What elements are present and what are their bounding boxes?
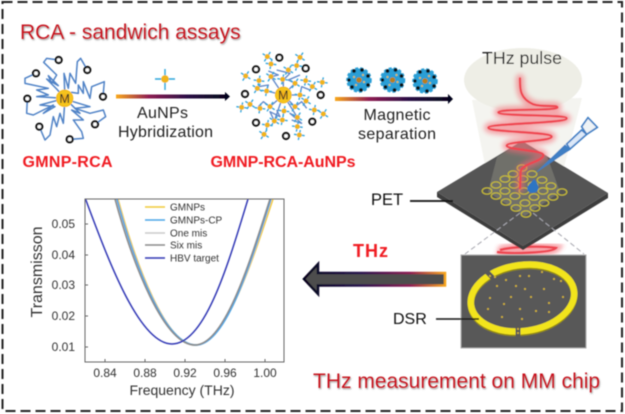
plot curves bbox=[86, 199, 273, 345]
label: AuNPs Hybridization: Hybridization bbox=[118, 124, 213, 141]
transmission chart bbox=[29, 199, 284, 398]
x axis title: Frequency (THz) bbox=[129, 382, 235, 398]
GMNP-RCA-AuNPs particle: M bbox=[278, 89, 289, 103]
y tick labels: 0.02 bbox=[52, 309, 75, 323]
legend: One mis bbox=[170, 228, 207, 240]
THz pulse beam cone bbox=[464, 48, 582, 190]
GMNP-RCA-AuNPs particle bbox=[236, 52, 328, 140]
x tick labels: 0.92 bbox=[173, 366, 197, 380]
big THz arrow bbox=[304, 264, 445, 294]
legend: HBV target bbox=[170, 254, 219, 264]
x tick labels bbox=[93, 366, 277, 380]
legend bbox=[145, 202, 223, 264]
label: AuNPs Hybridization bbox=[118, 105, 213, 141]
label: GMNP-RCA: GMNP-RCA bbox=[22, 154, 113, 171]
lower red wave segment bbox=[497, 247, 556, 253]
label: PET with leader line bbox=[371, 191, 453, 209]
y tick labels: 0.03 bbox=[52, 278, 75, 292]
y tick labels: 0.05 bbox=[52, 217, 75, 231]
arrow: AuNPs hybridization bbox=[116, 92, 230, 101]
y tick labels: 0.04 bbox=[52, 248, 75, 262]
label: Magnetic separation bbox=[358, 107, 436, 143]
AuNP icon bbox=[155, 69, 175, 90]
label: THz pulse: THz pulse bbox=[482, 48, 562, 68]
x tick labels: 1.00 bbox=[253, 366, 277, 380]
three separated particles bbox=[347, 68, 436, 93]
plot frame bbox=[85, 199, 284, 362]
red THz wave bbox=[488, 78, 567, 188]
legend: GMNPs bbox=[170, 202, 205, 214]
y tick labels bbox=[52, 217, 75, 354]
y tick labels: 0.01 bbox=[52, 340, 75, 354]
metamaterial chip on PET bbox=[437, 141, 608, 250]
arrow: magnetic separation bbox=[335, 94, 453, 104]
GMNP-RCA particle: M bbox=[59, 92, 70, 106]
zoom guide lines bbox=[465, 213, 584, 254]
label: PET with leader line: PET bbox=[371, 191, 403, 209]
label: GMNP-RCA-AuNPs: GMNP-RCA-AuNPs bbox=[210, 154, 356, 171]
label: Magnetic separation: Magnetic bbox=[364, 107, 430, 124]
legend: Six mis bbox=[170, 240, 202, 252]
label: THz: THz bbox=[353, 241, 388, 261]
label: Magnetic separation: separation bbox=[358, 126, 436, 143]
x tick labels: 0.96 bbox=[213, 366, 237, 380]
x tick labels: 0.88 bbox=[133, 366, 157, 380]
label: DSR with leader line: DSR bbox=[393, 311, 427, 328]
legend: GMNPs-CP bbox=[170, 216, 223, 226]
label: AuNPs Hybridization: AuNPs bbox=[137, 105, 188, 122]
y axis title: Transmisson bbox=[29, 227, 46, 317]
panel: DSR zoom view bbox=[461, 255, 586, 348]
icon: pipette and droplet bbox=[527, 118, 597, 193]
GMNP-RCA particle bbox=[24, 57, 106, 142]
label: DSR with leader line bbox=[393, 311, 479, 328]
label: THz measurement on MM chip: THz measurement on MM chip bbox=[313, 370, 600, 393]
x tick labels: 0.84 bbox=[93, 366, 117, 380]
title: RCA sandwich assays: RCA - sandwich assays bbox=[20, 21, 241, 44]
